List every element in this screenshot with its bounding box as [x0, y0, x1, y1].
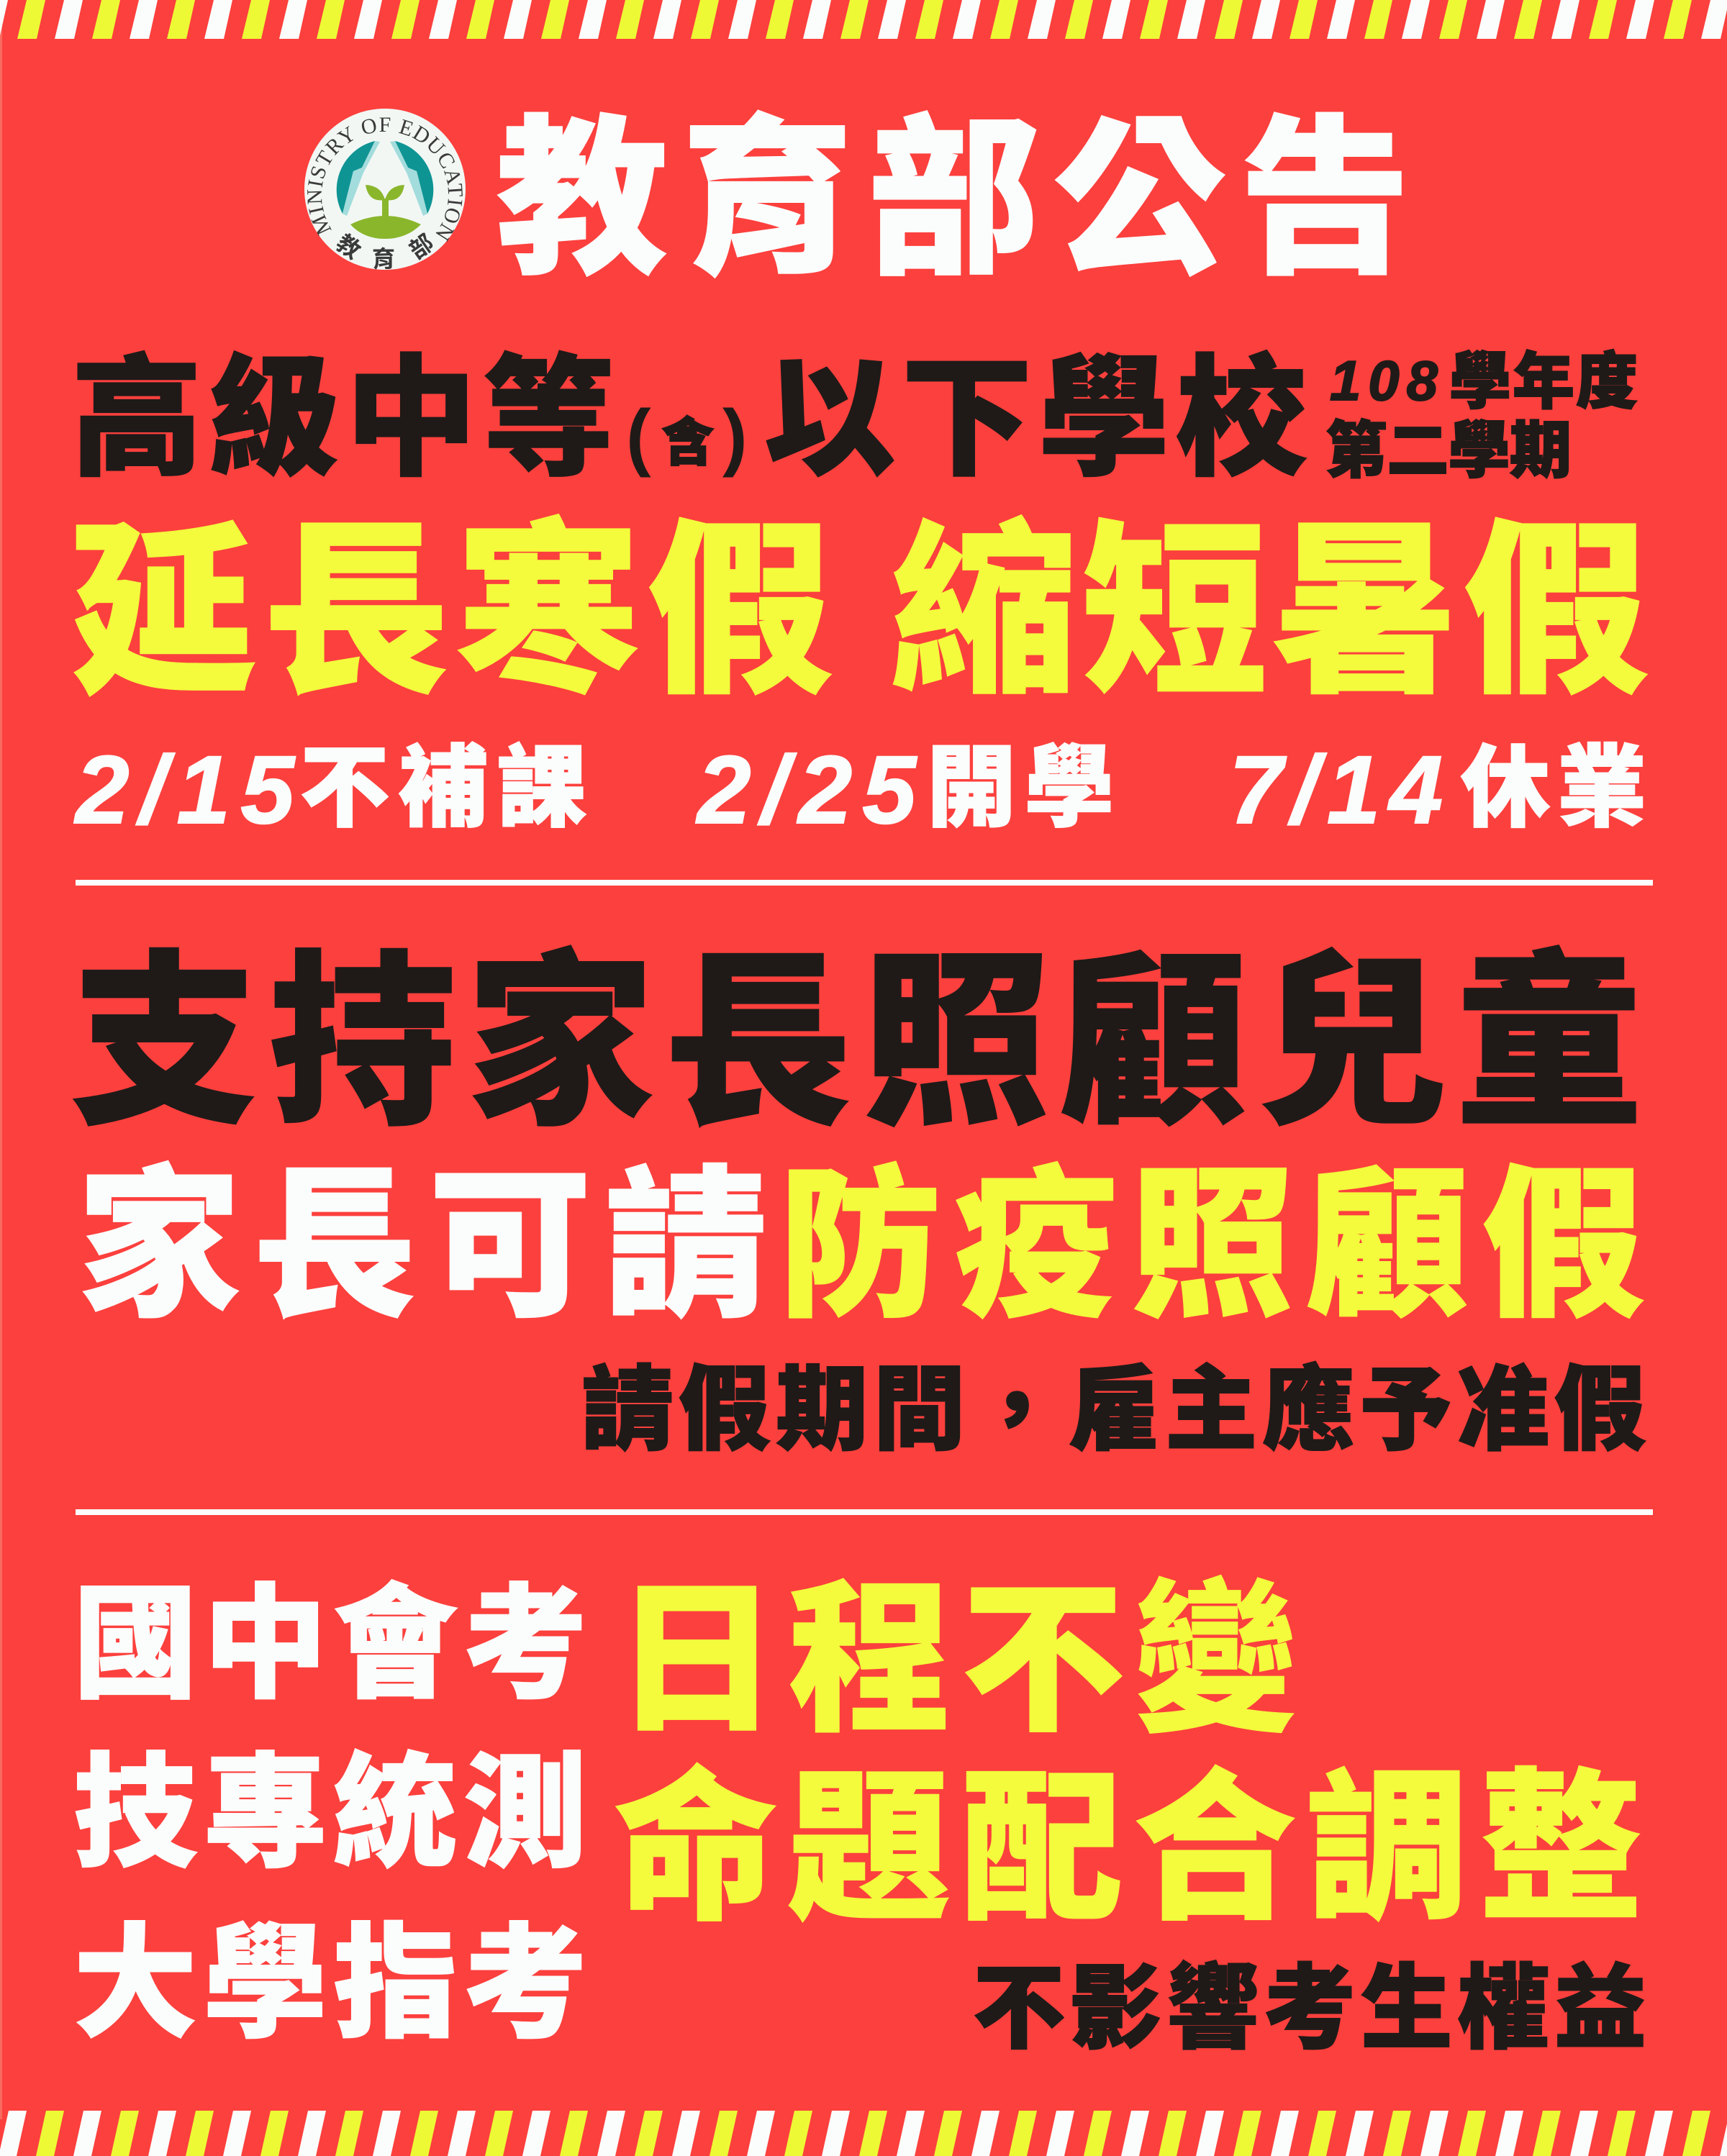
heading: high school and below: (: [626, 395, 651, 478]
heading: high school and below: 含: [662, 414, 714, 472]
semester note: 108: [1330, 349, 1438, 412]
statement: parents may take care leave: 防疫照顧假: [779, 1155, 1645, 1337]
headline: extend winter break, shorten summer break: 延長寒假: [71, 508, 833, 716]
exam names list: 大學指考: [73, 1915, 587, 2053]
statement: parents may take care leave: 家長可請: [78, 1155, 767, 1337]
key dates: 開學: [927, 739, 1114, 838]
note: employers should approve leave: 請假期間，雇主應予准假: [581, 1359, 1646, 1462]
heading: high school and below: 以下學校: [764, 345, 1307, 492]
exam names list: 技專統測: [73, 1745, 587, 1883]
key dates: 不補課: [300, 739, 586, 838]
key dates: 2/15: [73, 737, 296, 844]
top hazard stripe border: [0, 0, 1727, 39]
statement: exam content adjusted: 命題配合調整: [615, 1757, 1642, 1939]
semester note: 學年度: [1449, 347, 1638, 417]
heading: high school and below: 高級中等: [71, 345, 614, 492]
icon: Ministry of Education logo: 部: [404, 229, 438, 264]
key dates: 2/25: [695, 737, 917, 844]
key dates: [73, 737, 1646, 844]
semester note: [1325, 347, 1638, 486]
key dates: 7/14: [1229, 737, 1443, 844]
heading: high school and below: [71, 345, 1307, 492]
bottom hazard stripe border: [0, 2111, 1727, 2156]
exam names list: [73, 1575, 587, 2053]
exam names list: 國中會考: [73, 1575, 587, 1714]
heading: high school and below: ): [722, 395, 748, 478]
headline: extend winter break, shorten summer break: [71, 508, 1649, 716]
note: student rights unaffected: 不影響考生權益: [973, 1957, 1646, 2060]
icon: Ministry of Education logo: MINISTRY OF EDUCATION: [307, 118, 463, 242]
heading: support parents caring for children: 支持家長照顧兒童: [71, 940, 1643, 1148]
semester note: 第二學期: [1325, 417, 1572, 486]
title: 教育部公告: [497, 105, 1410, 296]
key dates: 休業: [1461, 739, 1646, 838]
statement: schedule unchanged: 日程不變: [615, 1569, 1297, 1751]
headline: extend winter break, shorten summer break: 縮短暑假: [891, 508, 1649, 716]
statement: parents may take care leave: [78, 1155, 1645, 1337]
icon: Ministry of Education logo: 育: [372, 246, 395, 272]
icon: Ministry of Education logo: 教: [332, 229, 366, 264]
